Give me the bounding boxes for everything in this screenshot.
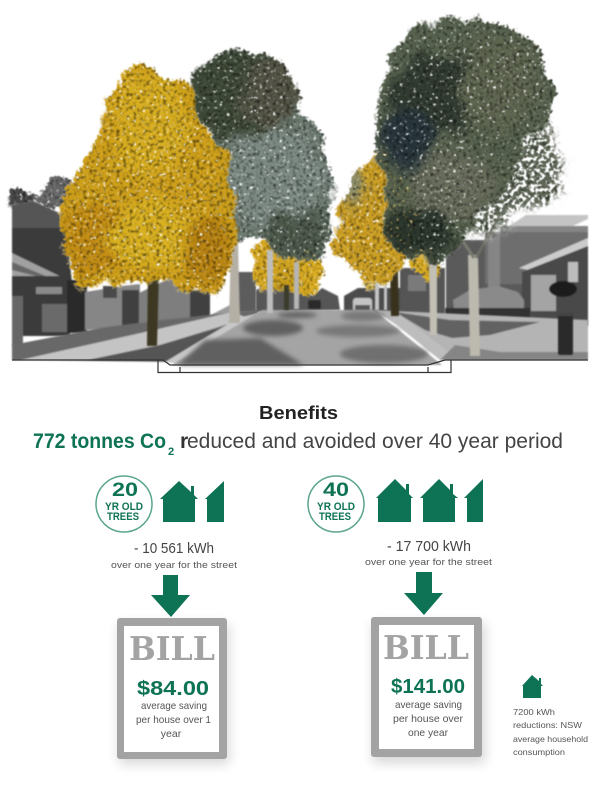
bill card: one year	[408, 727, 448, 739]
houses left	[12, 201, 256, 346]
trunk of right yellow tree	[390, 270, 399, 316]
houses right	[445, 215, 588, 326]
arrow down	[151, 575, 190, 617]
energy reduction text	[365, 538, 492, 568]
sparse outer foliage of right gum tree	[470, 120, 568, 240]
legend text: average household	[513, 734, 588, 744]
road cross-section outline	[12, 360, 588, 372]
energy reduction text: over one year for the street	[365, 557, 492, 568]
legend	[513, 675, 588, 757]
heading: Benefits: Benefits	[259, 403, 338, 423]
energy reduction text	[111, 540, 237, 571]
trunk of yellow tree	[147, 272, 159, 346]
left lawn and sidewalk	[12, 310, 264, 364]
badge: 20 yr old trees: 20	[112, 480, 138, 501]
icon: half house	[205, 481, 224, 522]
bill card: $84.00	[137, 678, 209, 700]
subheading: tonnes reduced: 2	[168, 446, 174, 458]
bill card: BILL	[383, 628, 469, 667]
rubbish bin	[557, 312, 574, 355]
trunks of right gum trees	[429, 190, 520, 356]
crown of right gum tree	[375, 18, 552, 262]
badge: 20 yr old trees: YR OLD	[105, 501, 143, 513]
badge: 40 yr old trees	[308, 476, 364, 532]
small yellow trees in distance	[251, 243, 440, 294]
trunk of middle gum tree	[229, 240, 240, 323]
bill card: BILL	[129, 629, 215, 668]
bill card: $141.00	[391, 676, 465, 698]
legend text: reductions: NSW	[513, 720, 582, 730]
column: 20 year old trees	[96, 476, 237, 764]
subheading: tonnes reduced: 772 tonnes Co	[33, 430, 166, 453]
icon: half house	[464, 479, 483, 522]
bill card: average saving	[395, 699, 462, 711]
bill card	[117, 618, 229, 764]
bill card	[371, 617, 485, 763]
bill card: per house over 1	[136, 714, 211, 726]
badge: 20 yr old trees	[96, 476, 152, 532]
street scene illustration	[8, 18, 588, 372]
road surface	[172, 310, 442, 365]
icon: house two	[420, 479, 458, 522]
subheading: tonnes reduced: educed and avoided over 40 year period	[187, 430, 563, 453]
right lawn and pavement	[374, 310, 588, 360]
badge: 40 yr old trees: TREES	[319, 511, 351, 523]
subheading: tonnes reduced: r	[180, 430, 188, 453]
far houses at end of street	[256, 268, 445, 318]
crown of middle gum tree	[186, 50, 336, 262]
legend text: consumption	[513, 747, 565, 757]
grey-green gum tree middle	[186, 50, 336, 323]
bill card: year	[161, 728, 182, 740]
crown of right yellow tree	[335, 146, 423, 287]
bill card: per house over	[393, 713, 464, 725]
legend text	[513, 707, 588, 757]
background trees left	[8, 177, 81, 211]
road tree shadows	[178, 311, 428, 365]
legend text: 7200 kWh	[513, 707, 555, 717]
badge: 20 yr old trees: TREES	[107, 511, 139, 523]
tree trunks distant	[267, 250, 387, 313]
crown of yellow tree	[60, 60, 238, 296]
ground: lawns, sidewalks, road	[12, 310, 588, 365]
arrow down	[404, 572, 443, 615]
badge: 40 yr old trees: 40	[323, 480, 349, 501]
icon: legend house	[522, 675, 543, 698]
icon: house	[160, 481, 198, 522]
energy reduction text: - 10 561 kWh	[134, 540, 214, 557]
bill card: average saving	[141, 700, 207, 712]
gum tree right	[375, 18, 568, 356]
energy reduction text: - 17 700 kWh	[387, 538, 471, 555]
energy reduction text: over one year for the street	[111, 560, 237, 571]
column: 40 year old trees	[308, 476, 492, 763]
yellow tree left	[60, 60, 238, 346]
badge: 40 yr old trees: YR OLD	[317, 501, 355, 513]
icon: house one	[376, 479, 413, 522]
subheading: tonnes reduced	[33, 430, 563, 458]
yellow tree right	[335, 146, 423, 316]
